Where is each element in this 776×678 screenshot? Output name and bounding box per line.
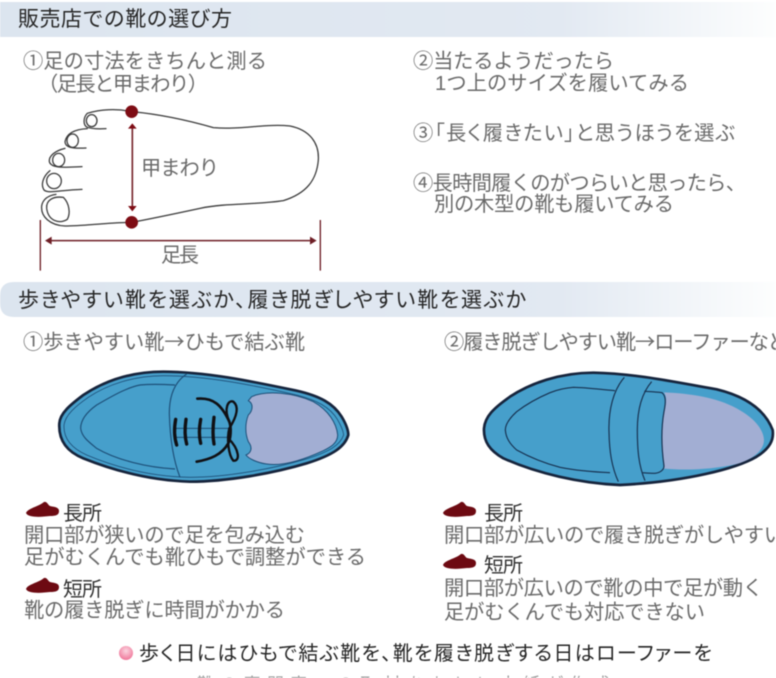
text block: step 1 measure foot: ①足の寸法をきちんと測る	[23, 50, 267, 73]
text block: steps 2 to 4: ③「長く履きたい」と思うほうを選ぶ	[413, 122, 735, 145]
text: loafer demerits: 開口部が広いので靴の中で足が動く	[444, 577, 763, 600]
text: lace-up merits: 足がむくんでも靴ひもで調整ができる	[24, 546, 366, 569]
text block: step 1 measure foot	[23, 50, 267, 96]
foot measurement diagram	[40, 105, 320, 271]
icon: pink bullet	[119, 646, 133, 660]
text block: steps 2 to 4: 1つ上のサイズを履いてみる	[435, 72, 689, 95]
subheading: lace-up shoes: ①歩きやすい靴→ひもで結ぶ靴	[23, 325, 305, 355]
left column: merits and demerits	[24, 502, 366, 622]
text block: steps 2 to 4: ④長時間履くのがつらいと思ったら、	[413, 172, 746, 195]
icon: small red shoe	[443, 502, 476, 517]
section heading: how to choose shoes at the store	[0, 2, 776, 37]
text block: steps 2 to 4: ②当たるようだったら	[413, 50, 614, 73]
text: lace-up merits	[24, 524, 366, 569]
text: lace-up merits: 開口部が狭いので足を包み込む	[24, 524, 305, 547]
label: foot length: 足長	[161, 245, 199, 267]
label: merits: 長所	[63, 502, 102, 525]
icon: small red shoe	[26, 578, 59, 593]
text: loafer merits: 開口部が広いので履き脱ぎがしやすい	[444, 524, 776, 547]
icon: small red shoe	[26, 502, 59, 517]
label: merits: 長所	[484, 502, 523, 525]
foot length ruler	[40, 220, 320, 271]
illustration: blue loafer	[484, 373, 773, 485]
right column: merits and demerits	[443, 502, 776, 624]
callout: summary advice	[119, 642, 712, 665]
illustration: blue lace-up shoe	[59, 372, 348, 482]
text block: step 1 measure foot: （足長と甲まわり）	[38, 73, 208, 96]
instep measurement points and arrow	[125, 105, 138, 229]
label: instep girth: 甲まわり	[141, 158, 219, 180]
section heading: walkable versus easy to remove: 歩きやすい靴を選ぶか、履き脱ぎしやすい靴を選ぶか	[18, 289, 526, 312]
text: loafer demerits	[444, 577, 763, 624]
text: lace-up demerits: 靴の履き脱ぎに時間がかかる	[24, 599, 285, 622]
text: loafer demerits: 足がむくんでも対応できない	[444, 601, 705, 624]
section heading: how to choose shoes at the store: 販売店での靴の選び方	[18, 8, 232, 31]
summary text: 歩く日にはひもで結ぶ靴を、靴を履き脱ぎする日はローファーを	[139, 642, 712, 665]
text block: steps 2 to 4	[413, 50, 746, 216]
text block: steps 2 to 4: 別の木型の靴も履いてみる	[434, 193, 674, 216]
foot outline with toes	[42, 110, 318, 226]
label: demerits: 短所	[63, 578, 102, 601]
label: demerits: 短所	[484, 554, 523, 577]
icon: small red shoe	[443, 554, 476, 569]
section heading: walkable versus easy to remove	[0, 282, 776, 317]
shoelaces	[175, 399, 238, 462]
